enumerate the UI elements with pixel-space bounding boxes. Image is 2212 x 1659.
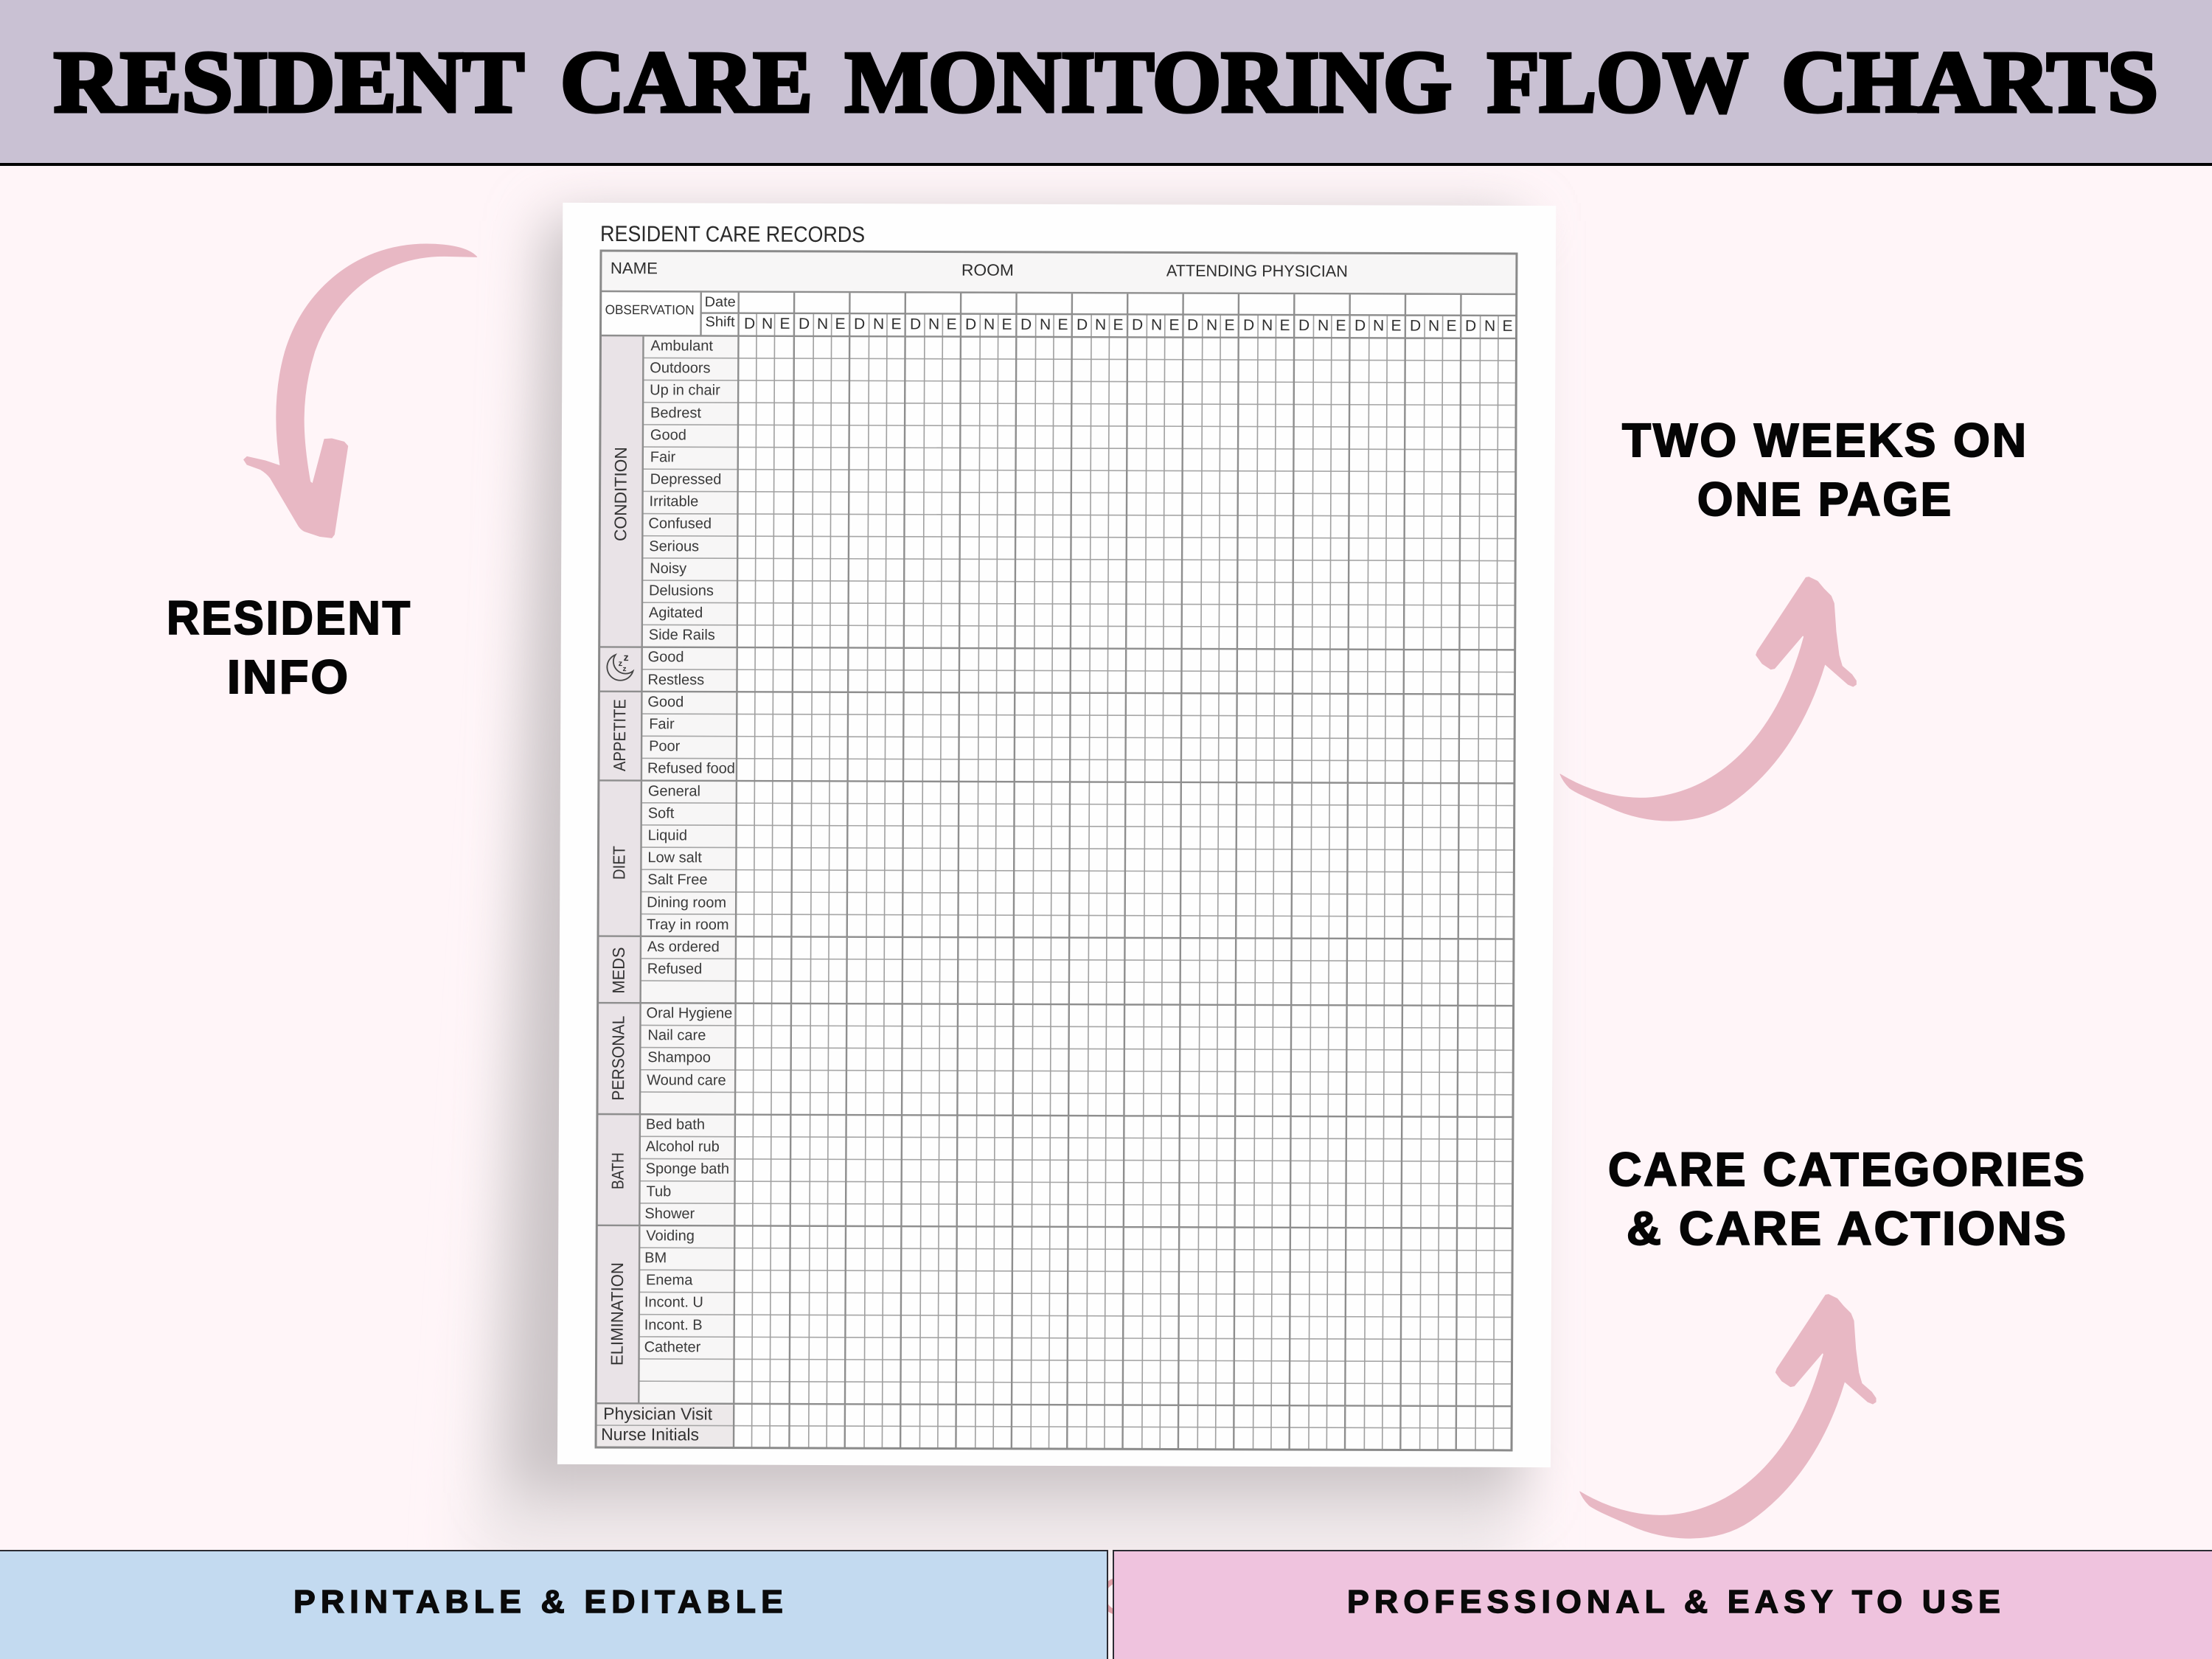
- label: two weeks on one page: TWO WEEKS ON: [1622, 414, 2028, 467]
- icon: sleep moon: [607, 651, 633, 681]
- title: RESIDENT: [54, 33, 524, 131]
- observation date shift labels: Date: [705, 294, 736, 310]
- sheet title: RESIDENT CARE RECORDS: [600, 222, 865, 247]
- physician visit and nurse initials labels: Physician Visit: [603, 1404, 713, 1424]
- footer panel: printable and editable: [0, 1551, 1107, 1659]
- shift letters D N E: DNEDNEDNEDNEDNEDNEDNEDNEDNEDNEDNEDNEDNEDNE: [744, 316, 1513, 335]
- row labels: Shampoo: [647, 1049, 711, 1065]
- row labels: Refused food: [647, 760, 735, 777]
- category labels: ELIMINATION: [607, 1262, 627, 1366]
- title: [54, 33, 2158, 131]
- icon: sleep moon: z: [619, 659, 623, 668]
- label: care categories and care actions: & CARE ACTIONS: [1627, 1202, 2068, 1255]
- category labels: APPETITE: [610, 699, 629, 771]
- arrow: care categories: [1580, 1295, 1876, 1538]
- row labels: Confused: [648, 515, 712, 532]
- row labels: Bed bath: [646, 1116, 705, 1133]
- label: two weeks on one page: [1622, 414, 2028, 526]
- partial ring behind footer gap: [1103, 1580, 1135, 1613]
- header banner: [0, 0, 2212, 166]
- title: MONITORING: [845, 33, 1452, 131]
- observation date shift labels: [605, 294, 736, 330]
- label: care categories and care actions: CARE CATEGORIES: [1608, 1143, 2087, 1196]
- category labels: BATH: [608, 1152, 627, 1189]
- category labels: MEDS: [609, 947, 628, 994]
- row labels: General: [648, 783, 700, 799]
- row labels: Delusions: [649, 582, 714, 599]
- category labels: CONDITION: [611, 447, 630, 541]
- row labels: Good: [648, 649, 684, 665]
- row labels: Oral Hygiene: [647, 1005, 732, 1022]
- row labels: Side Rails: [649, 627, 715, 644]
- label: two weeks on one page: ONE PAGE: [1697, 473, 1953, 526]
- title: CARE: [560, 33, 813, 131]
- category labels: DIET: [609, 846, 629, 880]
- name row labels: ATTENDING PHYSICIAN: [1166, 261, 1348, 280]
- row labels: Outdoors: [650, 360, 711, 376]
- row labels: Serious: [649, 538, 699, 554]
- footer panel: professional and easy to use: [1113, 1551, 2212, 1659]
- row labels: Low salt: [647, 849, 702, 866]
- icon: sleep moon: z: [623, 665, 627, 673]
- row labels: Soft: [648, 805, 675, 821]
- paper: [557, 203, 1556, 1467]
- label: resident info: RESIDENT: [167, 591, 412, 644]
- row labels: Dining room: [647, 894, 726, 911]
- icon: sleep moon: z: [624, 651, 629, 663]
- row labels: Incont. U: [644, 1294, 703, 1310]
- row labels: BM: [644, 1250, 667, 1266]
- row labels: Fair: [649, 716, 675, 732]
- table backgrounds: [596, 251, 1517, 1450]
- row labels: Tub: [646, 1183, 671, 1200]
- row labels: Enema: [646, 1272, 693, 1288]
- row labels: Wound care: [647, 1072, 726, 1089]
- row labels: Agitated: [649, 605, 703, 621]
- category labels: [607, 447, 630, 1366]
- label: resident info: INFO: [227, 650, 350, 703]
- row labels: Shower: [644, 1206, 695, 1222]
- title: CHARTS: [1781, 33, 2158, 131]
- row labels: Good: [650, 427, 686, 443]
- physician visit and nurse initials labels: Nurse Initials: [601, 1425, 699, 1444]
- resident care record sheet: [557, 203, 1556, 1467]
- row labels: Depressed: [650, 471, 721, 488]
- row labels: Incont. B: [644, 1317, 703, 1333]
- row labels: Irritable: [649, 493, 698, 509]
- title: FLOW: [1487, 33, 1748, 131]
- name row labels: [611, 259, 1348, 280]
- observation date shift labels: OBSERVATION: [605, 302, 695, 317]
- row labels: Voiding: [646, 1228, 695, 1244]
- row labels: Catheter: [644, 1339, 701, 1355]
- row labels: Tray in room: [647, 917, 729, 933]
- row labels: Bedrest: [650, 405, 701, 421]
- category labels: PERSONAL: [608, 1015, 628, 1101]
- name row labels: NAME: [611, 259, 658, 277]
- row labels: [644, 338, 737, 1356]
- label: resident info: [167, 591, 412, 703]
- row labels: As ordered: [647, 939, 720, 956]
- row labels: Good: [647, 694, 684, 710]
- footer panel: printable and editable: PRINTABLE & EDITABLE: [293, 1584, 788, 1620]
- label: care categories and care actions: [1608, 1143, 2087, 1255]
- paper drop shadow: [472, 221, 1519, 1571]
- arrow: two weeks: [1560, 577, 1856, 821]
- row labels: Alcohol rub: [646, 1138, 720, 1155]
- row labels: Sponge bath: [646, 1161, 729, 1178]
- row labels: Refused: [647, 961, 702, 977]
- row labels: Restless: [647, 672, 704, 688]
- observation date shift labels: Shift: [706, 314, 735, 330]
- row labels: Noisy: [650, 560, 686, 577]
- row labels: Ambulant: [650, 338, 713, 354]
- physician visit and nurse initials labels: [601, 1404, 713, 1444]
- arrow: resident info: [244, 244, 477, 538]
- row labels: Salt Free: [647, 872, 708, 888]
- row labels: Poor: [649, 738, 681, 754]
- row labels: Up in chair: [650, 382, 720, 399]
- table grid: [596, 251, 1517, 1450]
- footer panel: professional and easy to use: PROFESSIONAL & EASY TO USE: [1347, 1584, 2006, 1620]
- row labels: Fair: [650, 449, 676, 465]
- row labels: Liquid: [648, 827, 687, 844]
- row labels: Nail care: [647, 1027, 706, 1043]
- name row labels: ROOM: [961, 261, 1014, 279]
